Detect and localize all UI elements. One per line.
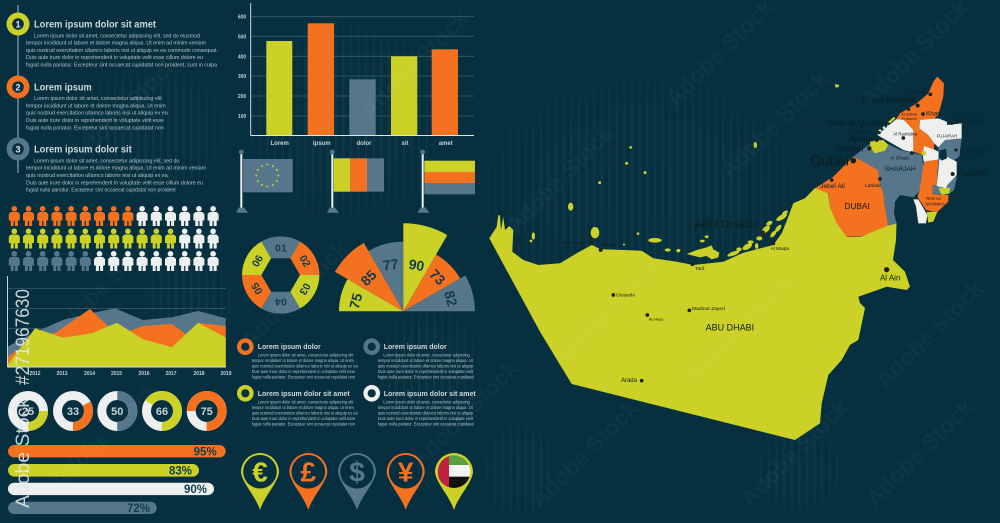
text block: white xyxy=(366,387,476,427)
bar 83% xyxy=(8,464,199,478)
x axis labels xyxy=(271,141,453,147)
hexagon ring chart: 01 xyxy=(275,242,287,254)
map labels north: RAS AL- xyxy=(926,196,943,201)
y axis labels: 100 xyxy=(238,114,246,120)
year labels: 2017 xyxy=(165,371,177,377)
bar 72% xyxy=(8,502,157,515)
Fujairah white south xyxy=(937,157,957,188)
map labels north: Khatt xyxy=(926,110,941,117)
map labels north: Umm al-Quwain xyxy=(827,117,886,127)
y axis labels: 600 xyxy=(238,15,246,21)
text block: white: Lorem ipsum dolor sit amet xyxy=(384,389,476,398)
fan chart: 73 xyxy=(426,266,449,288)
item 1: tempor incididunt ut labore et dolore magna aliqua. Ut enim ad minim veniam xyxy=(26,41,207,47)
stock id watermark xyxy=(13,289,34,508)
bar 95%: 95% xyxy=(194,446,217,458)
item 3: quis nostrud exercitation ullamco laboris nisi ut aliquip ex ea xyxy=(26,173,168,179)
map labels west coast: Tarif xyxy=(695,266,705,272)
text block: white: Lorem ipsum dolor sit amet, consectetur adipiscing xyxy=(383,400,470,405)
map labels west coast xyxy=(562,220,789,272)
background stripes xyxy=(130,90,808,484)
flag: vertical stripes xyxy=(327,150,384,213)
item 1: Duis aute irure dolor in reprehenderit in voluptate velit esse cillum dolore eu xyxy=(26,55,203,61)
Sharjah east xyxy=(933,138,962,194)
map labels north: Khor Fakkan xyxy=(960,149,987,154)
item 1: Lorem ipsum dolor sit amet, consectetur adipiscing elit, sed do eiusmod xyxy=(34,33,200,39)
map labels west coast: Al Maqta xyxy=(771,246,789,251)
pin: yen xyxy=(387,453,425,510)
hexagon ring chart: 05 xyxy=(249,280,266,296)
item 3: Duis aute irure dolor in reprehenderit in voluptate velit esse cillum dolore eu xyxy=(26,180,203,186)
text block: slate: Lorem ipsum dolor sit amet, consectetur adipiscing xyxy=(383,353,470,358)
map: UAE xyxy=(489,77,988,440)
item 2: tempor incididunt ut labore et dolore magna aliqua. Ut enim xyxy=(26,103,166,109)
x axis labels: sit xyxy=(401,141,409,147)
year labels xyxy=(29,371,232,377)
y axis labels: 500 xyxy=(238,34,246,40)
hexagon ring chart: 03 xyxy=(296,281,313,297)
Abu Dhabi mainland xyxy=(489,188,910,440)
bar chart xyxy=(238,3,474,147)
item 2 xyxy=(6,76,168,131)
bar 72%: 72% xyxy=(127,503,150,515)
map labels north: Al Dhaid xyxy=(890,156,909,162)
item 3: tempor incididunt ut labore et dolore magna aliqua. Ut enim ad minim veniam xyxy=(26,166,207,172)
text block: orange: quis nostrud exercitation ullamco laboris nisi ut aliquip ex ea xyxy=(252,363,358,368)
stock id watermark: Adobe Stock xyxy=(13,398,34,508)
bar 90%: 90% xyxy=(184,484,207,496)
text block: orange: Lorem ipsum dolor sit amet, consectetur adipiscing elit xyxy=(258,353,354,358)
x axis labels: Lorem xyxy=(271,141,289,147)
donut 66 xyxy=(141,390,183,432)
year labels: 2013 xyxy=(56,371,68,377)
map labels interior: Arada xyxy=(621,378,638,384)
y axis labels xyxy=(238,15,246,120)
map labels north: DUBAI xyxy=(844,201,870,211)
bar 90% xyxy=(8,483,214,496)
year labels: 2016 xyxy=(138,371,150,377)
y axis labels: 300 xyxy=(238,74,246,80)
map labels north: Al-Rams xyxy=(908,89,926,94)
Ras Al-Khaimah north xyxy=(896,77,944,155)
item 2: Duis aute irure dolor in reprehenderit in voluptate velit esse xyxy=(26,118,164,124)
map labels north: FUJAIRAH xyxy=(937,134,957,139)
pin: dollar xyxy=(338,453,376,510)
x axis labels: amet xyxy=(439,141,453,147)
item 1 xyxy=(6,12,218,68)
text block: yellow: tempor incididunt ut labore et dolore magna aliqua. Ut enim xyxy=(252,405,354,410)
white specks xyxy=(879,125,889,132)
map labels interior: Ghayathi xyxy=(616,293,635,298)
text block: white: Duis aute irure dolor in reprehenderit in voluptate velit xyxy=(378,416,474,421)
item 2: fugiat nulla pariatur. Excepteur sint occaecat cupidatat non xyxy=(26,125,164,131)
Ras Al-Khaimah south xyxy=(917,159,948,213)
text block: yellow: Lorem ipsum dolor sit amet, consectetur adipiscing elit xyxy=(258,400,354,405)
fan chart: 90 xyxy=(407,256,426,274)
bar 83%: 83% xyxy=(169,466,192,478)
flag: stars xyxy=(236,150,293,213)
x axis labels: ipsum xyxy=(313,141,331,147)
faint stock watermarks: Adobe Stock xyxy=(65,50,183,168)
text block: orange xyxy=(239,340,358,380)
stock id watermark: #271967630 xyxy=(13,289,34,385)
map pins xyxy=(241,453,473,510)
pin: euro xyxy=(241,453,279,510)
Fujairah white north xyxy=(919,118,962,147)
item 3: 3 xyxy=(15,144,21,154)
text block: slate: Lorem ipsum dolor xyxy=(384,342,447,351)
pin: yen: ¥ xyxy=(398,456,414,488)
map labels interior: Madinat Zayed xyxy=(692,306,725,312)
pictogram people rows xyxy=(9,206,219,271)
Kalba white xyxy=(913,199,927,223)
map labels north: Jebel Ali xyxy=(820,183,845,190)
x axis labels: dolor xyxy=(356,141,372,147)
donut 50 xyxy=(102,396,133,426)
fan chart: 85 xyxy=(357,266,380,289)
item 1: Lorem ipsum dolor sit amet xyxy=(34,20,157,31)
map labels north: Hamriyah xyxy=(851,129,871,134)
text block: white: fugiat nulla pariatur. Excepteur sint occaecat cupidatat xyxy=(378,422,474,427)
map labels north xyxy=(811,89,988,211)
faint stock watermarks: Adobe Stock xyxy=(715,65,833,183)
white enclave xyxy=(923,146,938,163)
faint stock watermarks: Adobe Stock xyxy=(680,270,798,388)
hexagon ring chart: 04 xyxy=(275,296,287,308)
bar 95% xyxy=(8,445,226,458)
faint stock watermarks: Adobe Stock xyxy=(870,275,988,393)
hexagon ring chart xyxy=(242,236,319,314)
faint stock watermarks: Adobe Stock xyxy=(545,255,663,373)
year labels: 2018 xyxy=(193,371,205,377)
donut 25 xyxy=(12,396,44,426)
faint stock watermarks: Adobe Stock xyxy=(45,225,163,343)
map labels north: Sharjah xyxy=(835,143,864,153)
text block: yellow: Duis aute irure dolor in reprehenderit in voluptate velit esse xyxy=(252,416,356,421)
text block: yellow: quis nostrud exercitation ullamco laboris nisi ut aliquip ex ea xyxy=(252,410,358,415)
item 2: Lorem ipsum xyxy=(34,82,92,93)
dark notch xyxy=(939,149,947,161)
item 2: quis nostrud exercitation ullamco laboris nisi ut aliquip ex ea xyxy=(26,111,168,117)
fan chart: 82 xyxy=(441,289,461,308)
pin: UAE flag xyxy=(435,453,473,510)
donut 75 xyxy=(191,396,222,426)
panel: numbered text list xyxy=(6,5,218,194)
northern emirates xyxy=(815,77,962,237)
map labels interior xyxy=(611,267,900,384)
item 2: Lorem ipsum dolor sit amet, consectetur adipiscing elit xyxy=(34,96,162,102)
map labels north: Dubai xyxy=(811,154,849,170)
map labels north: SHARJAH xyxy=(885,166,916,173)
yellow enclaves xyxy=(870,140,888,153)
faint stock watermarks: Adobe Stock xyxy=(405,355,523,473)
text block: slate xyxy=(366,340,474,380)
item 3: Lorem ipsum dolor sit amet, consectetur adipiscing elit, sed do xyxy=(34,158,179,164)
map labels west coast: Jebel Dhana xyxy=(562,241,584,245)
Sharjah emirate xyxy=(853,138,924,226)
donut 50: 50 xyxy=(111,406,123,418)
year labels: 2014 xyxy=(84,371,95,377)
text block: yellow: Lorem ipsum dolor sit amet xyxy=(258,389,350,398)
faint stock watermarks: Adobe Stock xyxy=(235,235,353,353)
faint stock watermarks: Adobe Stock xyxy=(860,393,978,511)
pin: euro: € xyxy=(252,456,268,488)
donut 25: 25 xyxy=(22,406,34,418)
item 1: 1 xyxy=(15,20,21,30)
people row 3 xyxy=(9,251,219,271)
pin: pound xyxy=(289,453,327,510)
item 1: fugiat nulla pariatur. Excepteur sint occaecat cupidatat non proident, sunt in culpa xyxy=(26,62,217,68)
y axis labels: 200 xyxy=(238,94,246,100)
map labels north: KHAIMAH xyxy=(926,201,944,206)
hexagon ring chart: 06 xyxy=(250,253,266,269)
text block: white: tempor incididunt ut labore et dolore magna aliqua. Ut xyxy=(378,405,473,410)
text block: yellow xyxy=(239,387,358,427)
map labels west coast: ABU DHABI xyxy=(694,220,756,231)
year labels: 2012 xyxy=(29,371,41,377)
fan chart: 77 xyxy=(382,255,400,274)
map labels north: Al Hamra xyxy=(901,117,918,121)
text block: slate: quis nostrud exercitation ullamco laboris nisi ut aliquip xyxy=(378,363,474,368)
map labels north: Ajman xyxy=(849,134,873,144)
year labels: 2019 xyxy=(220,371,232,377)
text block: yellow: fugiat nulla pariatur. Excepteur sint occaecat cupidatat non xyxy=(252,422,356,427)
item 3 xyxy=(6,138,207,194)
pin: pound: £ xyxy=(301,456,317,488)
map labels north: Ras Al-Khaimah xyxy=(862,95,916,104)
text block: slate: fugiat nulla pariatur. Excepteur sint occaecat cupidatat xyxy=(378,375,474,380)
pin: dollar: $ xyxy=(349,456,365,488)
map labels interior: Al Ain xyxy=(880,273,900,282)
text block: slate: Duis aute irure dolor in reprehenderit in voluptate velit xyxy=(378,369,474,374)
faint stock watermarks: Adobe Stock xyxy=(45,375,163,493)
text block: orange: tempor incididunt ut labore et dolore magna aliqua. Ut enim xyxy=(252,358,354,363)
donut 33 xyxy=(52,390,94,432)
faint stock watermarks: Adobe Stock xyxy=(735,393,853,511)
progress bars xyxy=(8,445,226,515)
donut 66: 66 xyxy=(156,406,168,418)
map labels north: Fujairah xyxy=(957,168,988,178)
people row 1 xyxy=(9,206,219,226)
donut charts xyxy=(12,390,222,432)
item 2: 2 xyxy=(15,82,21,92)
text block: orange: Duis aute irure dolor in reprehenderit in voluptate velit esse xyxy=(252,369,356,374)
text block: slate: tempor incididunt ut labore et dolore magna aliqua. Ut xyxy=(378,358,473,363)
donut 33: 33 xyxy=(67,406,79,418)
text block: orange: fugiat nulla pariatur. Excepteur sint occaecat cupidatat non xyxy=(252,375,356,380)
area chart xyxy=(8,276,232,377)
map labels interior: Bu Hasa xyxy=(649,317,664,321)
fan chart: 75 xyxy=(346,291,365,311)
map labels interior: ABU DHABI xyxy=(706,323,754,333)
item 3: Lorem ipsum dolor sit xyxy=(34,145,132,156)
map labels north: Al Jazirah xyxy=(901,112,917,116)
map labels north: Al Rashidiya xyxy=(893,131,918,136)
y axis labels: 400 xyxy=(238,54,246,60)
map labels north: Dibba Al-Hisn xyxy=(953,118,982,123)
item 3: fugiat nulla pariatur. Excepteur sint occaecat cupidatat non proident xyxy=(26,188,176,194)
hexagon ring chart: 02 xyxy=(296,253,313,269)
year labels: 2015 xyxy=(111,371,122,377)
islands xyxy=(530,142,789,259)
map labels north: Lahbab xyxy=(865,183,881,189)
text block: white: quis nostrud exercitation ullamco laboris nisi ut aliquip xyxy=(378,410,474,415)
map labels west coast: Ruwais xyxy=(601,242,615,247)
Umm al-Quwain white xyxy=(877,119,913,153)
item 1: quis nostrud exercitation ullamco laboris nisi ut aliquip ex ea commodo consequat. xyxy=(26,48,218,54)
flag: horizontal stripes xyxy=(418,150,475,213)
text block: orange: Lorem ipsum dolor xyxy=(258,342,321,351)
faint stock watermarks: Adobe Stock xyxy=(525,395,643,513)
people row 2 xyxy=(9,228,219,248)
fan chart xyxy=(335,223,475,311)
Dubai emirate xyxy=(815,157,888,237)
faint stock watermarks: Adobe Stock xyxy=(500,120,618,238)
donut 75: 75 xyxy=(201,406,213,418)
faint stock watermarks: Adobe Stock xyxy=(355,5,473,123)
